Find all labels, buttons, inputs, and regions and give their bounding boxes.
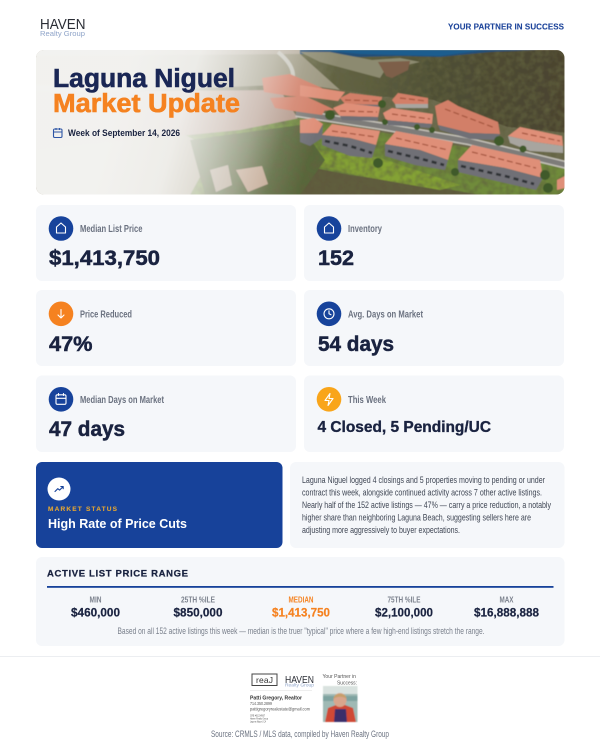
card: Price Reduced: Price Reduced bbox=[80, 308, 132, 320]
panel: market commentary bbox=[290, 462, 564, 548]
card: Avg. Days on Market: 54 days bbox=[318, 333, 394, 356]
footer tagline bbox=[322, 674, 357, 686]
card: Inventory: Inventory bbox=[348, 223, 382, 235]
panel: market status: MARKET STATUS bbox=[48, 506, 118, 513]
panel: market status: High Rate of Price Cuts bbox=[48, 516, 187, 531]
stat: 75th percentile: $2,100,000 bbox=[375, 608, 433, 620]
card: Avg. Days on Market: Avg. Days on Market bbox=[348, 308, 423, 320]
card: Median List Price bbox=[36, 205, 296, 281]
card: Median Days on Market: 47 days bbox=[49, 418, 125, 441]
source note: Source: CRMLS / MLS data, compiled by Haven Realty Group bbox=[211, 729, 389, 739]
stat: 25th percentile: 25TH %ILE bbox=[181, 596, 216, 604]
stat: min bbox=[71, 596, 120, 620]
panel: market commentary: adjusting more aggressively to buyer expectations. bbox=[302, 525, 460, 536]
agent contact details bbox=[250, 696, 310, 724]
card: Price Reduced bbox=[36, 290, 296, 366]
card: Median List Price: Median List Price bbox=[80, 223, 143, 235]
hero title: Market Update bbox=[53, 90, 240, 118]
card: Median Days on Market bbox=[36, 376, 296, 452]
tagline: YOUR PARTNER IN SUCCESS bbox=[448, 22, 565, 32]
hero title bbox=[53, 65, 240, 118]
stat: 75th percentile: 75TH %ILE bbox=[388, 596, 421, 604]
hero banner bbox=[36, 50, 566, 195]
stat: median: $1,413,750 bbox=[272, 608, 330, 620]
card: Price Reduced: 47% bbox=[49, 333, 93, 356]
agent contact details: CRE #01234567 bbox=[250, 714, 265, 718]
brokerage logo: reaj: reaJ bbox=[256, 675, 273, 685]
card: This Week: 4 Closed, 5 Pending/UC bbox=[318, 419, 491, 436]
stat: 25th percentile bbox=[174, 596, 222, 620]
agent photo bbox=[323, 686, 358, 722]
card: Inventory bbox=[304, 205, 564, 281]
shrubs bbox=[325, 100, 553, 193]
footer agent card bbox=[250, 674, 358, 724]
logo: Haven Realty Group: HAVEN bbox=[40, 16, 86, 33]
agent contact details: pattigregoryrealestate@gmail.com bbox=[250, 706, 310, 712]
card: Inventory: 152 bbox=[318, 247, 354, 270]
footer tagline: Success: bbox=[337, 680, 357, 686]
stat: 25th percentile: $850,000 bbox=[174, 608, 222, 620]
footer logo: Haven: Realty Group bbox=[285, 682, 315, 688]
card: Median Days on Market: Median Days on Market bbox=[80, 394, 164, 406]
logo: Haven Realty Group: Realty Group bbox=[40, 29, 85, 38]
panel: market status bbox=[36, 462, 282, 548]
footer tagline: Your Partner in bbox=[322, 674, 356, 680]
card: This Week: This Week bbox=[348, 394, 386, 406]
back row houses bbox=[262, 74, 563, 153]
panel: active list price range: ACTIVE LIST PRICE RANGE bbox=[47, 568, 188, 580]
agent contact details: 714.350.2899 bbox=[250, 701, 273, 706]
hero title: Laguna Niguel bbox=[53, 65, 235, 93]
stat: 75th percentile bbox=[375, 596, 433, 620]
date line with calendar icon: Week of September 14, 2026 bbox=[68, 128, 180, 139]
panel: active list price range bbox=[36, 557, 564, 646]
agent contact details: Haven Realty Group bbox=[250, 718, 268, 720]
stat: max: $16,888,888 bbox=[474, 608, 540, 620]
footer logo: Haven: HAVEN bbox=[285, 674, 314, 686]
stat: min: MIN bbox=[90, 596, 102, 604]
agent contact details: Patti Gregory, Realtor bbox=[250, 696, 303, 702]
front row houses bbox=[300, 118, 565, 190]
card: Median List Price: $1,413,750 bbox=[49, 247, 160, 270]
hero aerial photo bbox=[36, 50, 566, 195]
card: This Week bbox=[304, 376, 564, 452]
agent contact details: Laguna Niguel, CA bbox=[250, 720, 266, 724]
stat: max: MAX bbox=[500, 596, 514, 604]
card: Avg. Days on Market bbox=[304, 290, 564, 366]
stat: median bbox=[272, 596, 330, 620]
stat: min: $460,000 bbox=[71, 608, 120, 620]
stat: median: MEDIAN bbox=[288, 596, 314, 604]
stat: max bbox=[474, 596, 540, 620]
